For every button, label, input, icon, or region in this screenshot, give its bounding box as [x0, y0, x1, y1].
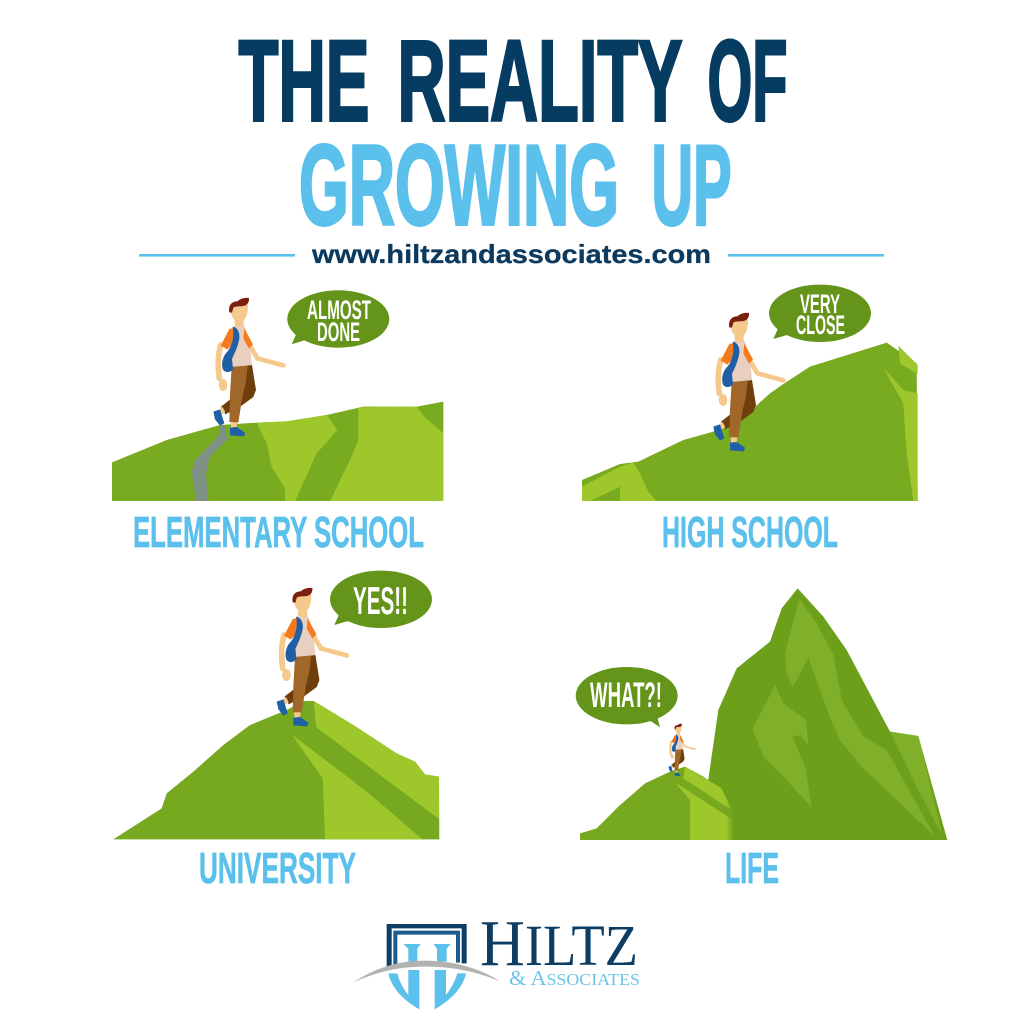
title: THE: [238, 18, 370, 146]
hiker: [213, 298, 283, 436]
subtitle: growing up: UP: [652, 122, 732, 250]
hiker: tiny: [669, 724, 695, 776]
hiker: [713, 313, 783, 451]
speech bubble: what: [576, 667, 678, 727]
speech bubble: very close: CLOSE: [796, 310, 845, 340]
label: life: LIFE: [725, 844, 779, 893]
label: high school: HIGH SCHOOL: [662, 508, 838, 557]
speech bubble: yes: YES!!: [353, 580, 408, 623]
panel: elementary school: [112, 290, 443, 557]
title: [238, 18, 788, 146]
panel: university: [113, 571, 439, 893]
label: elementary school: ELEMENTARY SCHOOL: [133, 508, 424, 557]
mountain: summit: [113, 701, 439, 839]
speech bubble: what: WHAT?!: [590, 676, 662, 715]
website url with rules: www.hiltzandassociates.com: [311, 239, 711, 269]
title: REALITY: [398, 18, 682, 146]
logo subtitle: & ASSOCIATES: [509, 966, 640, 990]
subtitle: growing up: GROWING: [299, 122, 619, 250]
speech bubble: yes: [330, 571, 432, 628]
panel: high school: [582, 285, 918, 557]
mountains: giant peak and small hill: [580, 588, 947, 840]
speech bubble: almost done: DONE: [317, 317, 360, 347]
title: OF: [708, 18, 788, 146]
logo shield: [353, 924, 501, 1009]
speech bubble: almost done: [287, 290, 389, 348]
mountain: steeper slope: [582, 343, 918, 501]
speech bubble: very close: VERY: [800, 289, 840, 319]
logo wordmark: HILTZ: [480, 907, 638, 980]
speech bubble: almost done: ALMOST: [307, 295, 371, 325]
hiker: [277, 588, 347, 726]
label: university: UNIVERSITY: [199, 844, 356, 893]
mountain: gentle hill: [112, 402, 443, 501]
logo: hiltz and associates: [353, 907, 640, 1009]
panel: life: [576, 588, 947, 893]
speech bubble: very close: [769, 285, 871, 342]
